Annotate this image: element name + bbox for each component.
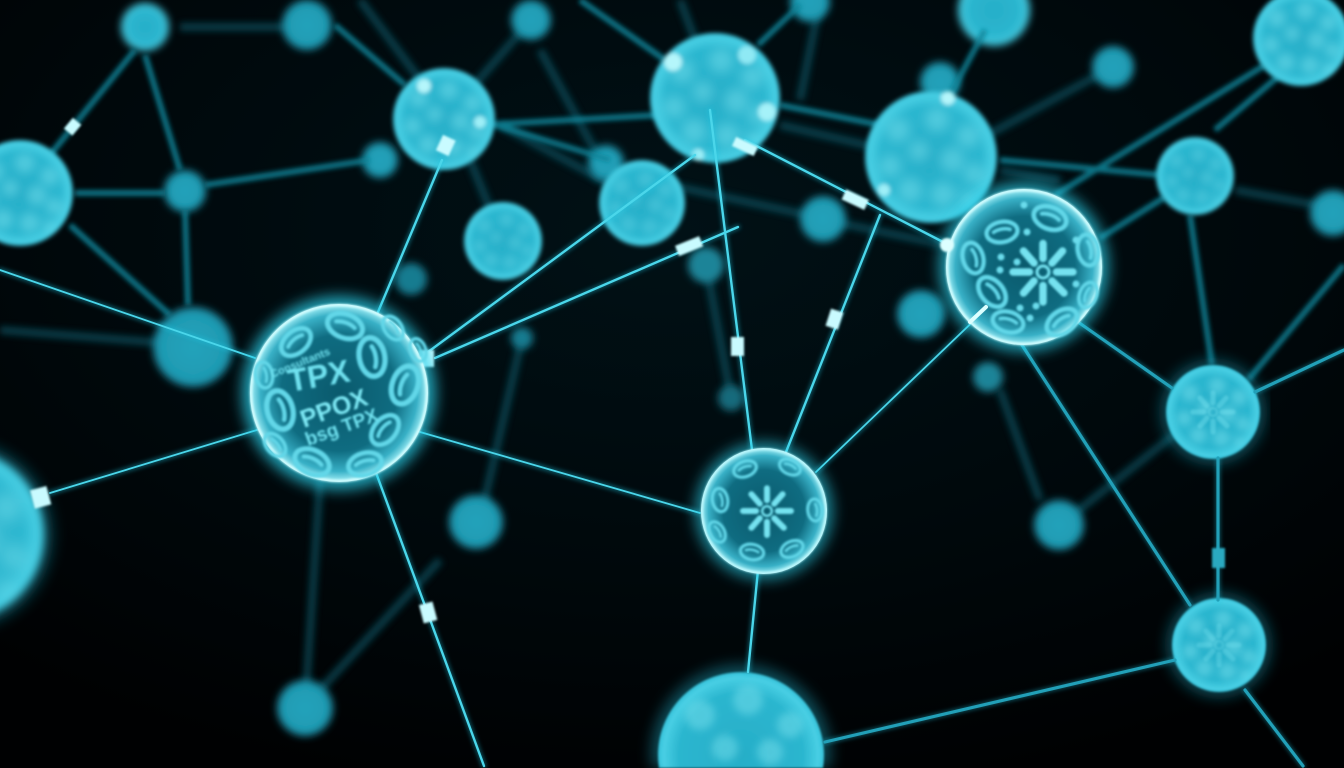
sphere: upper left	[0, 140, 73, 246]
midground lines	[50, 0, 1344, 380]
sphere: right upper	[1156, 137, 1234, 215]
sphere: right lower	[1167, 593, 1271, 697]
surface markings: PPOX	[296, 383, 372, 434]
sphere: right middle	[1161, 360, 1265, 464]
sphere: upper right of centre	[865, 91, 997, 223]
sphere: left of main	[153, 307, 233, 387]
surface markings: TPX	[285, 353, 353, 399]
surface markings	[705, 456, 823, 562]
right sphere	[939, 182, 1109, 352]
sphere: left edge	[0, 443, 50, 627]
surface markings: bsg TPX	[303, 405, 381, 451]
sphere: top right corner	[1253, 0, 1344, 86]
sphere: top centre left	[393, 68, 495, 170]
surface markings: Consultants	[269, 346, 332, 381]
connector nodes	[30, 118, 1225, 623]
surface markings	[959, 202, 1101, 341]
sphere: centre small	[464, 202, 542, 280]
surface markings	[253, 309, 429, 480]
highlight points	[940, 238, 954, 252]
sphere: bottom centre	[651, 665, 831, 768]
centre sphere	[695, 442, 833, 580]
sphere: top centre	[650, 33, 780, 163]
main sphere with PPOX text	[242, 296, 436, 490]
sphere: centre upper	[599, 160, 685, 246]
